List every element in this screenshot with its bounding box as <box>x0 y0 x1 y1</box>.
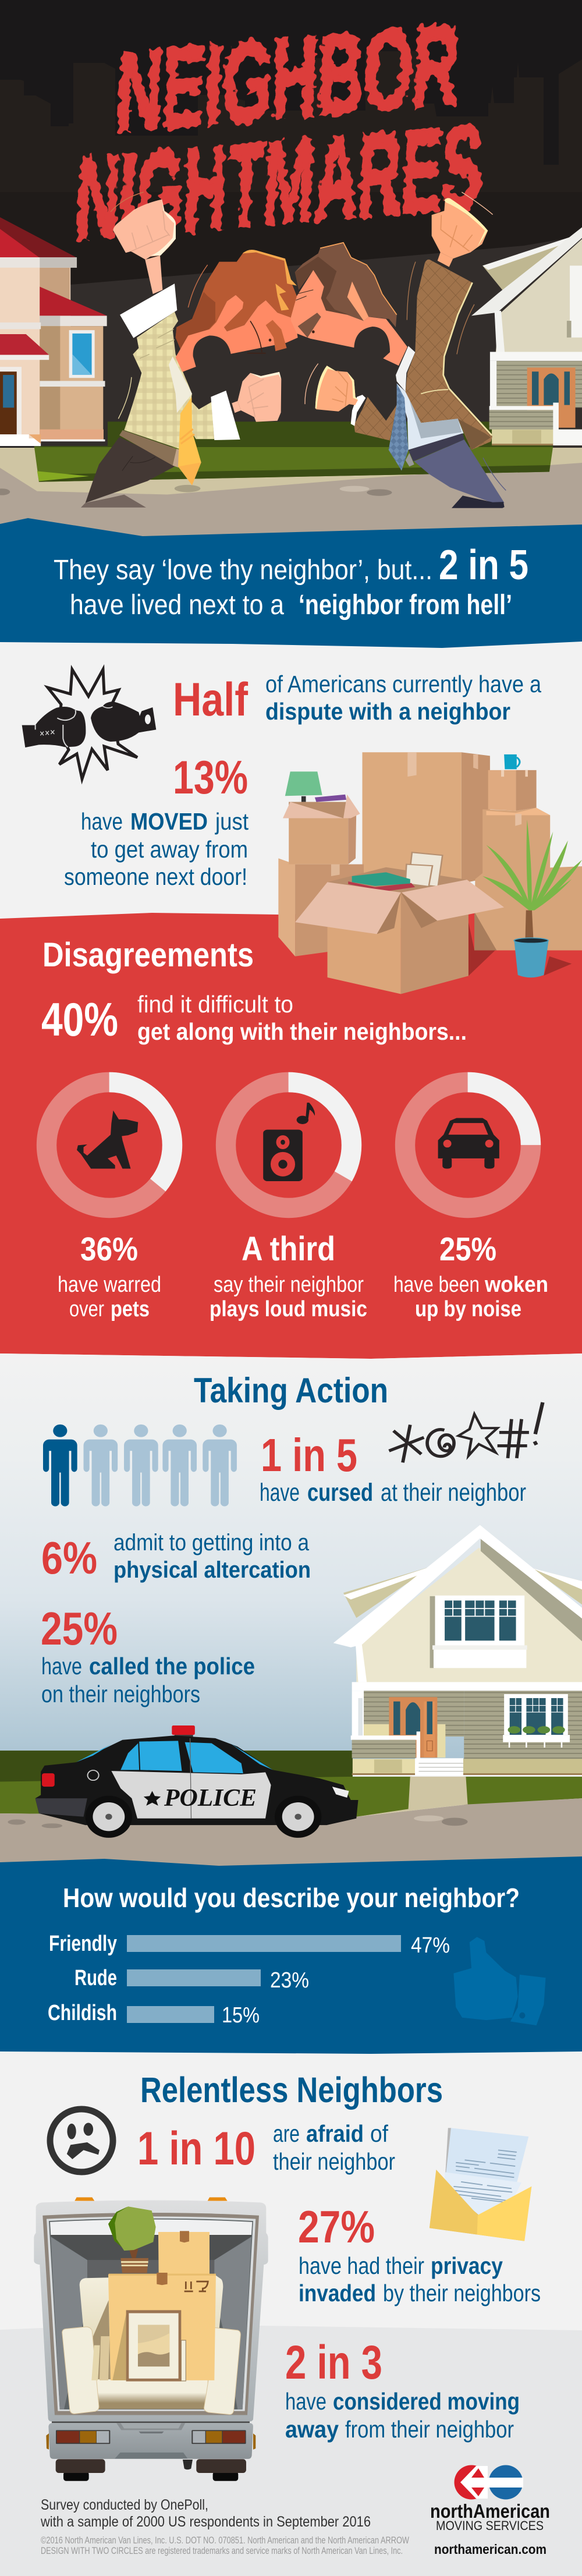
stat: 27%: 27% <box>298 2201 375 2252</box>
belt <box>409 433 464 461</box>
lower fist <box>232 401 241 413</box>
panel: hero night scene <box>0 0 582 548</box>
panel: half of Americans and moved <box>22 669 582 994</box>
label: 36% pets: have warred <box>58 1273 161 1297</box>
website: northamerican.com <box>434 2542 546 2557</box>
panel: disagreements red background <box>0 908 582 1359</box>
heading: Relentless Neighbors <box>140 2070 443 2110</box>
text: currently have a dispute: of Americans currently have a <box>265 671 541 697</box>
label: 36% pets: over <box>69 1297 104 1321</box>
text: currently have a dispute <box>265 671 541 725</box>
footer copyright: ©2016 North American Van Lines, Inc. U.S. DOT NO. 070851. North American and the North American ARROW <box>41 2535 409 2546</box>
text: afraid: afraid <box>306 2120 364 2147</box>
panel: relentless neighbors lower band <box>0 2326 582 2576</box>
text: called the police: have <box>41 1653 82 1679</box>
raised forearm <box>145 256 162 294</box>
text: called the police: called the police <box>89 1653 255 1679</box>
title <box>73 0 485 266</box>
heading: How would you describe your neighbor? <box>63 1883 520 1913</box>
stat: 1 in 5: 1 in 5 <box>261 1429 357 1481</box>
stat: Half: Half <box>173 674 249 726</box>
stat: 25%: 25% <box>41 1603 118 1654</box>
rear lawn shadow <box>35 236 582 466</box>
text: have cursed <box>260 1479 526 1507</box>
icon: boxing gloves <box>22 669 156 779</box>
bar chart: 15% <box>222 2003 260 2028</box>
head <box>295 243 397 327</box>
text: privacy invaded: invaded <box>299 2280 376 2306</box>
text: have cursed: cursed <box>307 1479 373 1507</box>
text: have moved <box>64 808 249 890</box>
text: have moved: to get away from <box>91 836 248 863</box>
tie <box>178 397 201 486</box>
text: privacy invaded: privacy <box>431 2252 503 2279</box>
bar chart: 23% <box>270 1968 309 1993</box>
pants <box>414 440 505 503</box>
sleeve <box>354 397 399 441</box>
left fighter <box>81 192 298 508</box>
text: have moved: MOVED <box>130 808 208 835</box>
lower fist <box>315 366 358 412</box>
text: physical altercation: admit to getting into a <box>113 1530 310 1555</box>
text: afraid: of <box>370 2120 389 2147</box>
jacket <box>406 260 492 450</box>
text: privacy invaded <box>299 2252 541 2306</box>
stat: 13%: 13% <box>173 752 248 804</box>
bar chart: Childish <box>48 2001 117 2025</box>
label: 25% noise: have been <box>393 1273 480 1297</box>
intro text line 2: have lived next to a <box>70 590 284 621</box>
stat: 40%: 40% <box>41 994 118 1046</box>
text: called the police <box>41 1653 255 1707</box>
torso <box>124 311 192 450</box>
text: find it difficult <box>137 991 467 1045</box>
text: have moved: someone next door! <box>64 863 247 890</box>
lower cuff <box>211 391 240 440</box>
label: 25% noise <box>393 1231 548 1321</box>
label: a third music <box>210 1230 367 1321</box>
city skyline <box>0 51 582 349</box>
panel: disagreements content <box>41 936 548 1321</box>
footer copyright: DESIGN WITH TWO CIRCLES are registered trademarks and service marks of North American Van Lines, Inc. <box>41 2545 403 2556</box>
lower sleeve <box>184 402 214 439</box>
bar chart: 47% <box>411 1933 450 1958</box>
text: considered moving: away <box>285 2416 339 2443</box>
heading: Taking Action <box>194 1371 388 1410</box>
right fighter <box>291 192 506 508</box>
label: 25% noise: 25% <box>439 1231 496 1268</box>
stat: 1 in 10: 1 in 10 <box>137 2123 255 2175</box>
text: find it difficult: find it difficult to <box>137 991 293 1018</box>
panel: relentless neighbors <box>34 2070 541 2481</box>
left house <box>0 217 107 446</box>
donut: music a third <box>226 1082 352 1208</box>
text: privacy invaded: have had their <box>299 2252 424 2279</box>
text: have cursed: at their neighbor <box>381 1479 526 1507</box>
label: a third music: plays loud music <box>210 1297 367 1321</box>
logo tagline: MOVING SERVICES <box>436 2518 544 2533</box>
illustration: moving boxes <box>278 752 582 994</box>
text: have moved: just <box>215 808 249 835</box>
label: 36% pets <box>58 1231 161 1321</box>
text: afraid <box>273 2120 395 2175</box>
label: a third music: say their neighbor <box>214 1273 364 1297</box>
logo <box>430 2465 550 2557</box>
tie <box>389 384 409 471</box>
shirt <box>397 384 464 450</box>
panel: describe your neighbor <box>0 1856 582 2054</box>
donut: noise 25% <box>405 1082 531 1208</box>
illustration: police car <box>36 1725 358 1838</box>
street scene <box>0 1751 582 1872</box>
panel: taking action <box>0 1353 582 1872</box>
label: 25% noise: up by noise <box>415 1297 521 1321</box>
raised forearm <box>438 253 453 267</box>
icon: curse symbols <box>389 1402 542 1462</box>
intro emphasis: ‘neighbor from hell’ <box>299 590 512 621</box>
heading: Disagreements <box>42 936 254 974</box>
icon: speaker <box>263 1103 315 1181</box>
label: 36% pets: pets <box>111 1297 150 1321</box>
icon: scared face <box>50 2109 113 2172</box>
panel: intro banner <box>0 518 582 648</box>
stat: 6%: 6% <box>41 1532 97 1583</box>
text: physical altercation <box>113 1530 311 1583</box>
text: have cursed: have <box>260 1479 300 1507</box>
collar <box>169 356 192 413</box>
illustration: house <box>333 1525 582 1776</box>
bar chart: Rude <box>74 1966 117 1990</box>
footer survey note: with a sample of 2000 US respondents in September 2016 <box>40 2514 371 2530</box>
label: 36% pets: 36% <box>80 1231 138 1268</box>
text: considered moving: have <box>285 2388 327 2415</box>
head <box>176 250 297 349</box>
wordmark: northAmerican <box>430 2500 550 2522</box>
text: have moved: have <box>81 808 123 835</box>
footer survey note <box>40 2497 371 2530</box>
street and lawn <box>0 421 582 548</box>
donut: pets 36% <box>47 1082 172 1208</box>
raised fist <box>113 199 176 260</box>
text: privacy invaded: by their neighbors <box>383 2280 541 2306</box>
raised cuff <box>120 284 177 338</box>
icon: envelope letter <box>430 2128 531 2241</box>
pictogram: 1 in 5 people <box>43 1425 237 1506</box>
icon: thumbs up <box>453 1937 546 2025</box>
pants <box>86 437 175 503</box>
right house <box>471 227 582 445</box>
text: physical altercation: physical altercation <box>113 1557 311 1583</box>
footer copyright <box>41 2535 409 2556</box>
car lettering: POLICE <box>164 1785 257 1812</box>
label: a third music: A third <box>242 1230 335 1268</box>
intro text line 1: They say ‘love thy neighbor’, but... <box>54 555 432 586</box>
icon: dog <box>77 1111 138 1169</box>
illustration: moving truck <box>34 2197 268 2481</box>
bar chart: Friendly <box>49 1932 117 1956</box>
text: afraid: their neighbor <box>273 2148 395 2175</box>
text: currently have a dispute: dispute with a neighbor <box>265 698 510 725</box>
icon: car <box>438 1118 499 1169</box>
bar chart <box>48 1932 450 2028</box>
belt <box>119 430 176 466</box>
text: considered moving: considered moving <box>333 2388 520 2415</box>
footer survey note: Survey conducted by OnePoll, <box>41 2497 208 2513</box>
text: find it difficult: get along with their neighbors... <box>137 1018 467 1045</box>
raised fist <box>432 199 488 258</box>
text: considered moving <box>285 2388 520 2443</box>
text: called the police: on their neighbors <box>41 1681 200 1707</box>
label: 25% noise: woken <box>484 1273 548 1297</box>
stat: 2 in 5: 2 in 5 <box>439 542 528 589</box>
text: afraid: are <box>273 2120 300 2147</box>
text: considered moving: from their neighbor <box>345 2416 514 2443</box>
stat: 2 in 3: 2 in 3 <box>285 2336 382 2389</box>
